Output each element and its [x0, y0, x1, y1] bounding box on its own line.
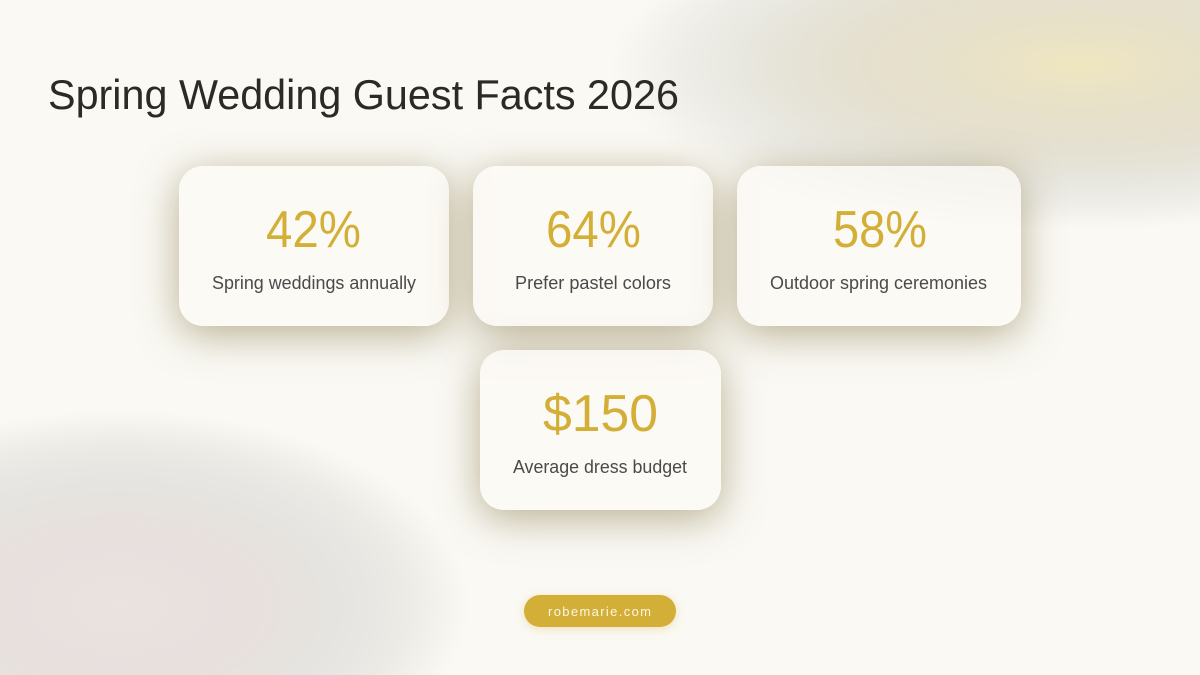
stat value 58%: 58% [833, 201, 927, 259]
stat value 64%: 64% [546, 201, 641, 259]
footer pill: website: robemarie.com [548, 604, 651, 619]
panel: stat card dress budget [480, 350, 721, 510]
stat value $150: $150 [543, 385, 658, 443]
stat label: Prefer pastel colors [515, 273, 671, 293]
footer pill: website [524, 595, 676, 627]
stat label: Spring weddings annually [212, 273, 416, 293]
panel: stat card spring weddings [179, 166, 449, 326]
title: Spring Wedding Guest Facts 2026 [48, 71, 679, 118]
stat value 42%: 42% [266, 201, 361, 259]
stat label: Average dress budget [513, 457, 687, 477]
panel: stat card pastel colors [473, 166, 713, 326]
stat label: Outdoor spring ceremonies [770, 273, 987, 293]
panel: stat card outdoor ceremonies [737, 166, 1021, 326]
